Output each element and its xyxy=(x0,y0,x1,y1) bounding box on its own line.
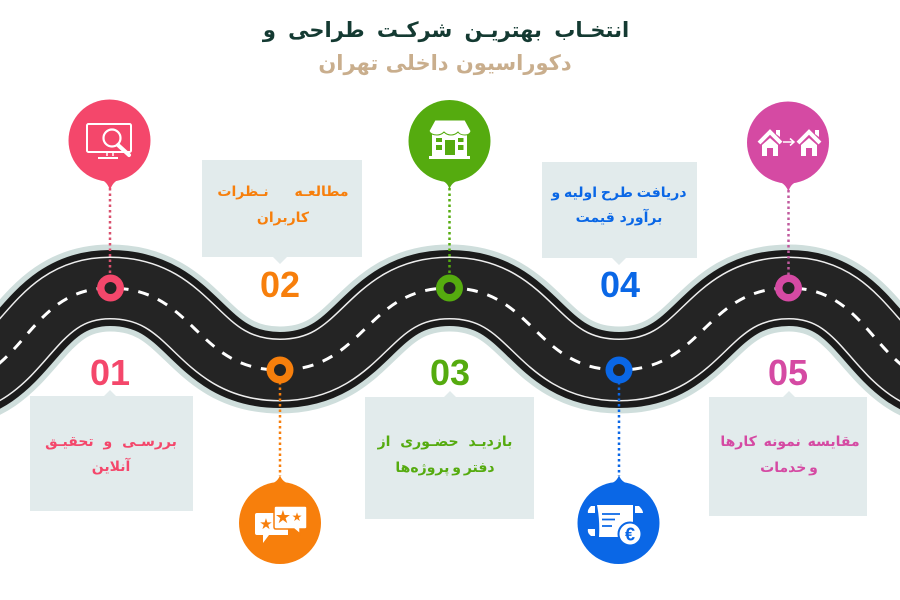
pin 05: compare xyxy=(747,102,829,302)
icon: rating speech bubbles xyxy=(255,506,307,543)
panel: step 03 xyxy=(365,352,534,519)
road xyxy=(0,288,900,385)
icon: invoice scroll with euro xyxy=(588,505,643,546)
icon: rating speech bubbles: ★ xyxy=(275,507,291,528)
number 02: 02 xyxy=(260,264,300,305)
text: step 03: بازدیـد حضـوری از xyxy=(377,434,512,450)
text: step 03: دفتر و پروژه‌ها xyxy=(395,460,495,476)
pin 02: ratings xyxy=(239,356,321,564)
pin 04: price estimate xyxy=(578,356,660,564)
text: step 02: کاربران xyxy=(257,210,310,226)
icon: rating speech bubbles: ★ xyxy=(292,510,302,524)
text: step 01 xyxy=(45,434,177,475)
icon: storefront xyxy=(429,120,471,159)
number 05: 05 xyxy=(768,352,808,393)
text: step 02: مطالعـه نـظرات xyxy=(217,184,349,200)
road marker 03 xyxy=(436,274,463,302)
text: step 04: دریافت طرح اولیه و xyxy=(550,185,687,201)
panel: step 02 xyxy=(202,160,362,305)
number 01: 01 xyxy=(90,352,130,393)
panel: step 05 xyxy=(709,352,867,516)
text: step 01: آنلاین xyxy=(92,457,131,475)
icon: monitor with magnifier xyxy=(87,124,131,158)
title: انتخـاب بهتریـن شرکـت طراحی و xyxy=(262,18,629,42)
pin 01: online research xyxy=(68,100,150,302)
road marker 05 xyxy=(775,274,802,302)
text: step 01: بررسـی و تحقیـق xyxy=(45,434,177,450)
icon: rating speech bubbles: ★ xyxy=(259,515,273,533)
text: step 04: برآورد قیمت xyxy=(576,208,662,226)
road marker 04 xyxy=(606,356,632,384)
road marker 01 xyxy=(97,274,124,302)
text: step 05 xyxy=(720,434,860,476)
panel: step 04 xyxy=(542,162,697,305)
title xyxy=(262,18,629,75)
text: step 03 xyxy=(377,434,512,476)
number 04: 04 xyxy=(600,264,640,305)
icon: invoice scroll with euro: € xyxy=(625,524,635,544)
text: step 05: و خدمات xyxy=(760,460,818,476)
pin 03: visit office xyxy=(408,100,490,302)
text: step 04 xyxy=(550,185,687,226)
text: step 05: مقایسه نمونه کارها xyxy=(720,434,860,450)
road marker 02 xyxy=(266,356,294,384)
panel: step 01 xyxy=(30,352,193,511)
number 03: 03 xyxy=(430,352,470,393)
title: دکوراسیون داخلی تهران xyxy=(318,51,572,75)
icon: two houses with arrow xyxy=(759,130,820,156)
text: step 02 xyxy=(217,184,349,226)
